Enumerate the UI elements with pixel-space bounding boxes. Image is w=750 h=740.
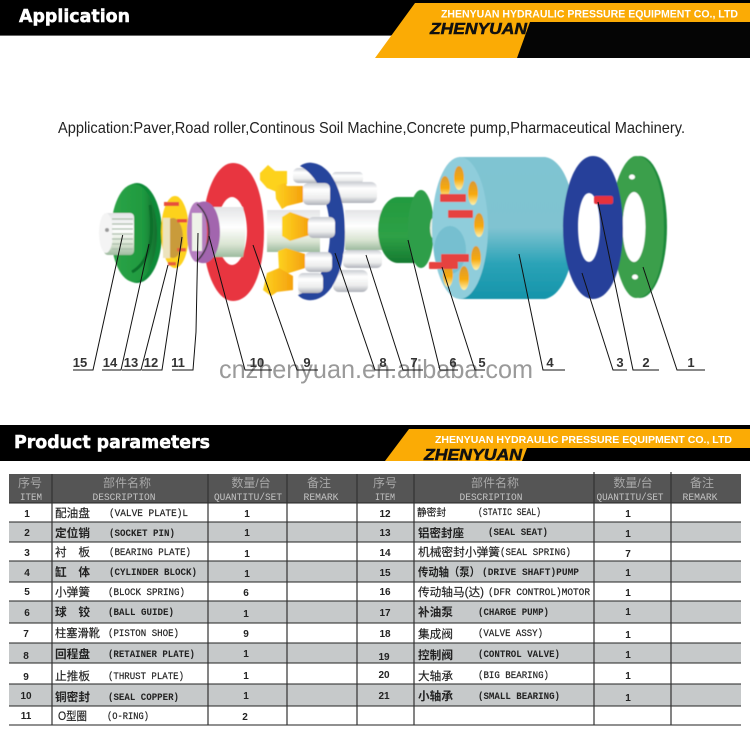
left column rows — [20, 506, 250, 723]
part 7: yellow piston shoes — [260, 165, 310, 296]
left column rows: 3 — [24, 548, 30, 559]
table header: 序号 — [373, 475, 397, 490]
right column rows: (BIG BEARING) — [478, 670, 549, 682]
left column rows: (PISTON SHOE) — [108, 628, 179, 640]
table header: ITEM — [20, 492, 42, 504]
leader lines and part numbers: 2 — [642, 355, 650, 370]
table header: 数量/台 — [613, 475, 653, 490]
company name second: ZHENYUAN HYDRAULIC PRESSURE EQUIPMENT CO., LTD — [435, 434, 732, 446]
second banner: Product parameters — [0, 425, 750, 461]
leader lines and part numbers: 9 — [303, 355, 311, 370]
left column rows: (O-RING) — [107, 711, 149, 723]
left column rows: (BLOCK SPRING) — [108, 587, 185, 599]
left column rows: 9 — [23, 672, 29, 683]
right column rows: 16 — [379, 587, 391, 598]
leader lines and part numbers: 4 — [546, 355, 554, 370]
top banner: Application — [0, 0, 750, 58]
left column rows: 6 — [243, 588, 249, 599]
left column rows: 1 — [243, 691, 249, 702]
left column rows: (THRUST PLATE) — [108, 671, 184, 683]
right column rows: 大轴承 — [418, 669, 454, 683]
left column rows: O型圈 — [58, 709, 87, 723]
left column rows: 1 — [244, 528, 250, 539]
right column rows: 19 — [378, 652, 390, 663]
right column rows: (SMALL BEARING) — [478, 691, 560, 703]
left column rows: 9 — [243, 629, 249, 640]
table header: 序号 — [18, 475, 42, 490]
right column rows: 小轴承 — [418, 689, 454, 703]
left column rows: 1 — [243, 649, 249, 660]
left column rows: 6 — [24, 608, 30, 619]
right column rows: (SEAL SPRING) — [500, 547, 571, 559]
application sentence: Application:Paver,Road roller,Continous Soil Machine,Concrete pump,Pharmaceutical Machinery. — [58, 120, 685, 137]
right column rows — [378, 506, 631, 704]
front pistons and centre piston — [298, 183, 385, 293]
left column rows: 8 — [23, 651, 29, 662]
part 14: green disc — [111, 183, 162, 283]
heading: Application: Application — [19, 6, 130, 27]
company name top: ZHENYUAN HYDRAULIC PRESSURE EQUIPMENT CO., LTD — [441, 8, 738, 20]
part 8: blue retainer plate — [298, 163, 345, 300]
left column rows: 10 — [20, 691, 32, 702]
right column rows: 机械密封小弹簧 — [418, 545, 500, 559]
shaded rows — [9, 522, 741, 706]
part 10: seal copper cylinder — [210, 207, 246, 257]
right column rows: 15 — [379, 568, 391, 579]
right column rows: (CONTROL VALVE) — [478, 649, 560, 661]
left column rows: 铜密封 — [55, 690, 91, 704]
left column rows: 止推板 — [55, 669, 91, 683]
left column rows: 11 — [21, 711, 32, 722]
left column rows: 2 — [24, 528, 30, 539]
right column rows: 20 — [378, 670, 390, 681]
left column rows: 7 — [23, 629, 29, 640]
left column rows: 回程盘 — [55, 647, 91, 661]
table rules — [9, 472, 741, 725]
left column rows: 小弹簧 — [55, 585, 90, 599]
left column rows: 1 — [243, 609, 249, 620]
table header: QUANTITU/SET — [596, 492, 664, 504]
left column rows: 1 — [244, 549, 250, 560]
left column rows: 4 — [24, 568, 30, 579]
left column rows: (VALVE PLATE)L — [109, 508, 188, 520]
left column rows: 1 — [244, 569, 250, 580]
leader lines and part numbers: 15 — [73, 355, 87, 370]
right column rows: 1 — [625, 693, 631, 704]
leader lines and part numbers: 1 — [687, 355, 695, 370]
leader lines and part numbers: 14 — [103, 355, 118, 370]
brand logotype second: ZHENYUAN — [423, 447, 522, 464]
left column rows: (SEAL COPPER) — [108, 692, 179, 704]
leader lines and part numbers: 5 — [478, 355, 486, 370]
leader lines and part numbers — [73, 202, 705, 370]
part 4: cylinder block — [432, 157, 575, 299]
piston shaft — [267, 210, 320, 252]
brand logotype top: ZHENYUAN — [429, 21, 527, 38]
right column rows: 控制阀 — [418, 648, 453, 662]
table header: DESCRIPTION — [92, 492, 156, 504]
left column rows: 衬 板 — [55, 545, 91, 559]
right column rows: 14 — [379, 548, 391, 559]
right column rows: 18 — [379, 629, 391, 640]
right column rows: (CHARGE PUMP) — [478, 607, 549, 619]
left column rows: 1 — [244, 509, 250, 520]
left column rows: 缸 体 — [55, 565, 91, 579]
left column rows: (CYLINDER BLOCK) — [109, 567, 197, 579]
right column rows: 7 — [625, 549, 631, 560]
left column rows: 配油盘 — [55, 506, 90, 520]
right column rows: 12 — [379, 509, 391, 520]
right column rows: 21 — [378, 691, 390, 702]
right column rows: 1 — [625, 529, 631, 540]
part 9: red thrust plate — [203, 163, 264, 301]
right column rows: 补油泵 — [418, 605, 454, 619]
part 2: red socket pin — [594, 196, 613, 204]
leader lines and part numbers: 13 — [124, 355, 138, 370]
part 5: red block springs — [429, 194, 473, 269]
right column rows: 13 — [379, 528, 391, 539]
right column rows: 1 — [625, 509, 631, 520]
table header: 数量/台 — [231, 475, 271, 490]
table header: 备注 — [307, 475, 331, 490]
leader lines and part numbers: 12 — [144, 355, 158, 370]
leader lines and part numbers: 11 — [171, 355, 185, 370]
leader lines and part numbers: 8 — [379, 355, 387, 370]
right column rows: 17 — [379, 608, 391, 619]
left column rows: 1 — [24, 509, 30, 520]
left column rows: 1 — [243, 671, 249, 682]
right column rows: 传动轴马(达) — [418, 585, 484, 599]
leader lines and part numbers: 10 — [250, 355, 264, 370]
leader lines and part numbers: 3 — [616, 355, 624, 370]
right column rows: (STATIC SEAL) — [478, 507, 541, 519]
heading: Product parameters: Product parameters — [14, 433, 210, 453]
right column rows: 1 — [625, 588, 631, 599]
left column rows: 定位销 — [55, 526, 91, 540]
valve plate slots — [629, 174, 638, 280]
left column rows: (BALL GUIDE) — [108, 607, 174, 619]
pistons behind retainer — [293, 168, 377, 295]
right column rows: 1 — [625, 630, 631, 641]
table header: REMARK — [304, 492, 339, 504]
part 15: splined drive shaft — [99, 213, 134, 255]
left column rows: 球 铰 — [55, 605, 91, 619]
table header — [9, 474, 741, 504]
right column rows: 铝密封座 — [418, 526, 464, 540]
parts table — [9, 472, 741, 725]
right column rows: 1 — [625, 650, 631, 661]
part 3: blue bearing plate — [563, 156, 623, 299]
left column rows: 柱塞滑靴 — [55, 626, 100, 640]
right column rows: (DFR CONTROL)MOTOR — [488, 587, 591, 599]
left column rows: 5 — [24, 587, 30, 598]
right column rows: (VALVE ASSY) — [478, 628, 543, 640]
left column rows: (BEARING PLATE) — [109, 547, 191, 559]
right column rows: 1 — [625, 568, 631, 579]
table header: REMARK — [682, 492, 718, 504]
left column rows: (SOCKET PIN) — [109, 528, 175, 540]
left column rows: (RETAINER PLATE) — [108, 649, 195, 661]
right column rows: 传动轴（泵） — [418, 565, 480, 579]
leader lines and part numbers: 7 — [410, 355, 418, 370]
exploded pump diagram — [99, 156, 667, 301]
table header: ITEM — [375, 492, 395, 504]
table header: 部件名称 — [471, 475, 519, 490]
right column rows: (DRIVE SHAFT)PUMP — [482, 567, 579, 579]
table header: QUANTITU/SET — [214, 492, 282, 504]
table header: 备注 — [690, 475, 714, 490]
parts 12-13: yellow plate with red pins — [161, 196, 189, 268]
right column rows: (SEAL SEAT) — [488, 527, 548, 539]
part 6: green ball guide — [378, 190, 436, 268]
right column rows: 集成阀 — [418, 627, 453, 641]
part 11: purple o-ring and spacer — [187, 201, 220, 263]
part 1: green valve plate — [612, 156, 667, 298]
block bores — [440, 166, 484, 290]
watermark: cnzhenyuan.en.alibaba.com — [219, 354, 533, 384]
table header: DESCRIPTION — [460, 492, 522, 504]
table header: 部件名称 — [103, 475, 151, 490]
leader lines and part numbers: 6 — [449, 355, 457, 370]
right column rows: 1 — [625, 607, 631, 618]
left column rows: 2 — [242, 712, 248, 723]
right column rows: 1 — [625, 671, 631, 682]
right column rows: 静密封 — [417, 506, 446, 519]
